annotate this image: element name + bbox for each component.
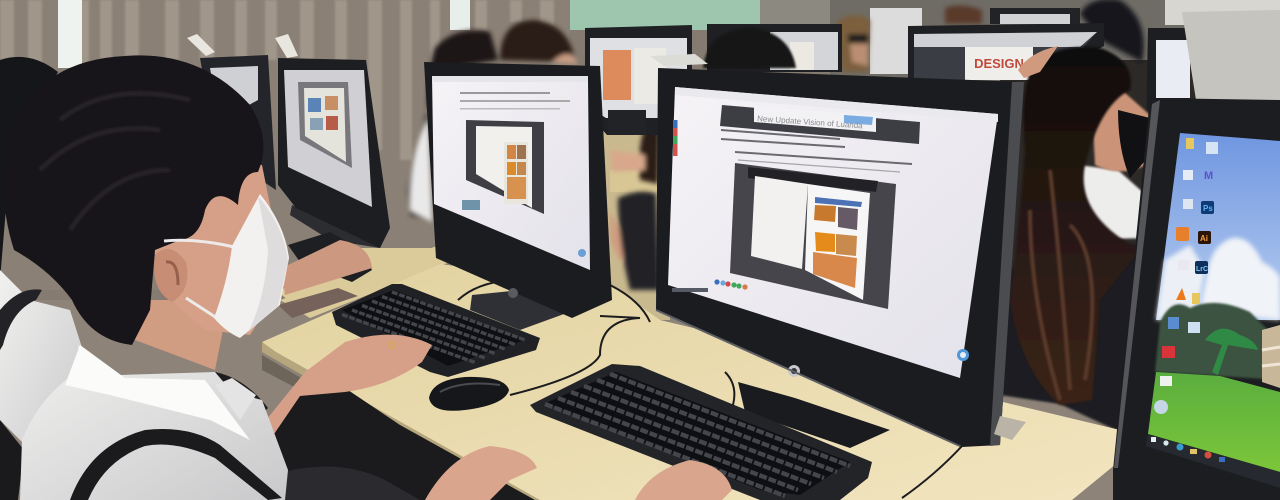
taskbar [1146, 434, 1280, 488]
monitor: back row right [707, 8, 1280, 130]
shirt [20, 345, 288, 500]
monitor: back centre [585, 25, 692, 135]
person: back row students [408, 0, 1144, 290]
ring on finger [389, 342, 395, 348]
paper notes on monitors [187, 34, 708, 66]
desktop icons: Ai [1200, 234, 1208, 243]
monitor: centre [424, 62, 612, 330]
monitor: right foreground with desktop wallpaper [1113, 98, 1280, 500]
white collar [1068, 165, 1146, 240]
phone on desk [278, 288, 358, 318]
on-screen banner: New Update Vision of Luanda [757, 114, 863, 130]
neck [105, 300, 225, 370]
on-screen text lines [721, 130, 912, 164]
desktop icons [1154, 138, 1218, 414]
lower hand [425, 446, 537, 500]
chair: foreground student's seat back [0, 372, 268, 500]
desk: front edge [262, 342, 540, 500]
wallpaper: grass [1148, 372, 1280, 472]
hand: on rear keyboard [282, 240, 372, 295]
cables [458, 280, 650, 395]
chair: back left legs and shadow [262, 355, 330, 395]
wallpaper: trees [1155, 303, 1280, 380]
person: back student head in front of monitor [703, 28, 796, 68]
desk: main desk surface [262, 264, 1120, 500]
label: on-screen design word: DESIGN [974, 56, 1024, 71]
ear [154, 249, 187, 302]
face [150, 150, 285, 335]
background: curtains and back wall [0, 0, 1280, 380]
wallpaper: sky [1156, 133, 1280, 320]
backpack strap [70, 429, 282, 500]
desktop icons: M [1204, 170, 1213, 182]
arm reaching to desk [258, 335, 432, 440]
face mask [214, 194, 289, 338]
face [1090, 72, 1150, 172]
desktop icons: Ps [1203, 204, 1213, 213]
monitor stand note [994, 416, 1026, 440]
icon: HP logo [788, 365, 800, 377]
mask ear straps [164, 240, 234, 320]
raised hand [1018, 46, 1058, 78]
trousers [262, 388, 535, 500]
mouse [429, 377, 509, 411]
person: foreground student [0, 55, 732, 500]
monitor: left far [200, 55, 276, 190]
chat bubble [957, 349, 969, 361]
monitor: main centre screen [656, 68, 1024, 448]
wallpaper: cloud [1200, 238, 1280, 320]
desk: left upper surface [278, 248, 445, 318]
keyboard: rear left [288, 232, 372, 282]
black mask [1118, 110, 1150, 178]
keyboard: centre [332, 284, 540, 377]
wallpaper: building [1262, 325, 1280, 388]
chair back [1000, 242, 1140, 432]
on-screen banner [720, 105, 920, 144]
on-screen flipbook viewer [730, 163, 896, 309]
left neighbour [0, 57, 86, 450]
on-screen share icons [672, 120, 748, 292]
desktop icons: LrC [1196, 266, 1208, 273]
chair armrest [284, 467, 420, 500]
hair [3, 55, 263, 345]
cables under monitor [725, 372, 962, 498]
monitor: left [278, 58, 390, 248]
long hair [1010, 47, 1140, 405]
desk: rear row with monitors [280, 245, 450, 318]
keyboard: main [530, 364, 872, 500]
person: right side student with long hair [1000, 46, 1150, 432]
